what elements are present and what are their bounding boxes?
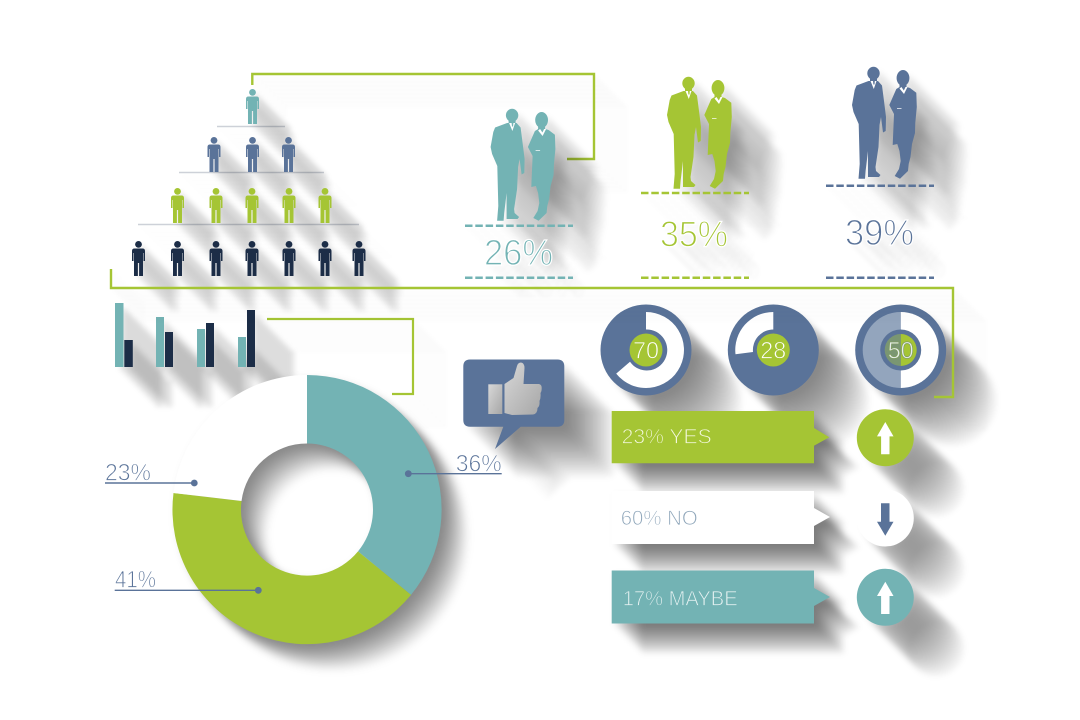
dashed line bottom (826, 276, 934, 279)
value 70: 70 (633, 337, 659, 364)
dial (728, 304, 819, 396)
banner label: 17% MAYBE (623, 588, 738, 611)
dashed line top (826, 184, 934, 187)
centre (757, 334, 790, 366)
silhouette: teal pair (491, 109, 555, 221)
banner label: 23% YES (622, 425, 712, 448)
banner shape (612, 411, 829, 463)
white arc (616, 312, 684, 388)
bubble (463, 360, 564, 449)
dashed line top (641, 192, 749, 194)
value 28: 28 (760, 337, 786, 364)
label 36%: 36% (456, 451, 502, 478)
label 41%: 41% (115, 567, 156, 594)
half rings (901, 312, 939, 388)
dashed line bottom (641, 276, 749, 279)
dashed line top (465, 224, 573, 227)
banner shape (612, 570, 830, 624)
business pair: green 35% (641, 77, 749, 278)
badge: up arrow green (857, 409, 914, 466)
label 23% (105, 460, 198, 487)
value 35%: 35% (660, 214, 728, 255)
progress circle 50 (855, 304, 946, 396)
label 23%: 23% (105, 460, 151, 487)
centre (630, 334, 662, 366)
progress circle 70 (600, 304, 692, 396)
pyramid of people icons (132, 89, 366, 276)
business pair: teal 26% (465, 109, 573, 278)
donut segments (172, 375, 442, 644)
dial (600, 304, 692, 396)
icon: thumb (488, 362, 542, 415)
banner: 23% yes (612, 411, 829, 463)
business pair: blue 39% (826, 67, 934, 278)
silhouette: blue pair (852, 67, 917, 179)
value 26%: 26% (484, 232, 553, 273)
centre halves (901, 334, 917, 366)
donut chart (105, 375, 502, 644)
banner: 60% no (612, 491, 830, 544)
pyramid shelf lines (138, 126, 359, 224)
dial (855, 304, 946, 396)
banner shape (612, 491, 830, 544)
value 39%: 39% (845, 212, 914, 253)
connector: pyramid to teal pair (252, 74, 594, 159)
banner label: 60% NO (621, 507, 698, 530)
connector: bars to donut (267, 319, 413, 394)
label 41% (115, 567, 262, 594)
dashed line bottom (465, 276, 573, 279)
banner: 17% maybe (612, 570, 830, 624)
bar chart (115, 303, 255, 367)
connector: mid rule to circles (111, 269, 953, 397)
thumbs-up speech bubble (463, 360, 564, 449)
white arc (735, 312, 773, 354)
people rows (132, 89, 366, 276)
progress circle 28 (728, 304, 819, 396)
silhouette: green pair (667, 77, 732, 189)
badge: up arrow teal (857, 569, 914, 626)
value 50: 50 (888, 337, 914, 364)
badge: down arrow white (857, 490, 914, 546)
label 36% (405, 451, 502, 478)
